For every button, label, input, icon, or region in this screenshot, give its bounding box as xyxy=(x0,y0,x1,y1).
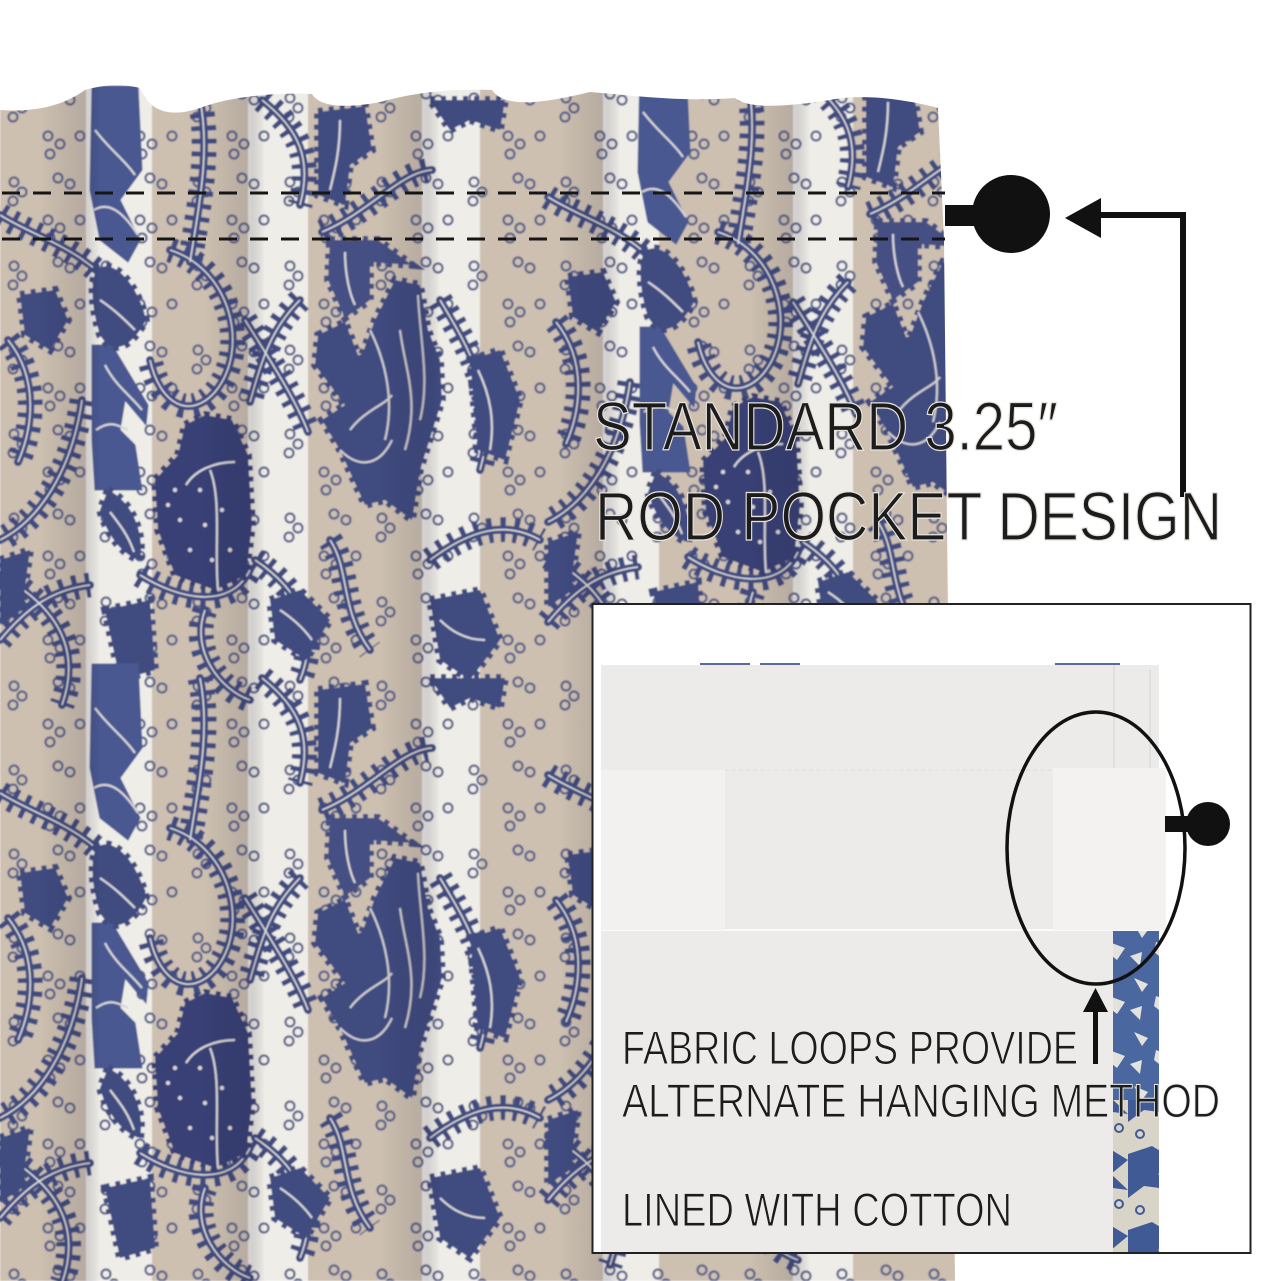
heading: rod pocket label xyxy=(593,388,1222,555)
seams xyxy=(601,665,1166,930)
text: fabric loops: FABRIC LOOPS PROVIDE xyxy=(622,1021,1078,1074)
icon: inset rod xyxy=(1165,802,1230,846)
top edge print xyxy=(700,663,1120,665)
text: fabric loops xyxy=(622,1021,1220,1127)
right fabric loop xyxy=(1053,768,1166,930)
loop highlight ellipse xyxy=(1007,712,1185,984)
arrow: rod pointer xyxy=(1065,198,1183,497)
heading: rod pocket label: STANDARD 3.25″ xyxy=(593,388,1058,465)
left fabric loop xyxy=(601,770,725,930)
icon: curtain rod xyxy=(945,175,1050,253)
text: lining: LINED WITH COTTON xyxy=(622,1183,1012,1236)
printed side strip xyxy=(1113,930,1159,1252)
arrow: loop pointer xyxy=(1083,988,1108,1064)
rod pocket dashed lines xyxy=(2,193,945,239)
panel: lining inset xyxy=(592,604,1250,1253)
lining fabric xyxy=(601,665,1159,1252)
